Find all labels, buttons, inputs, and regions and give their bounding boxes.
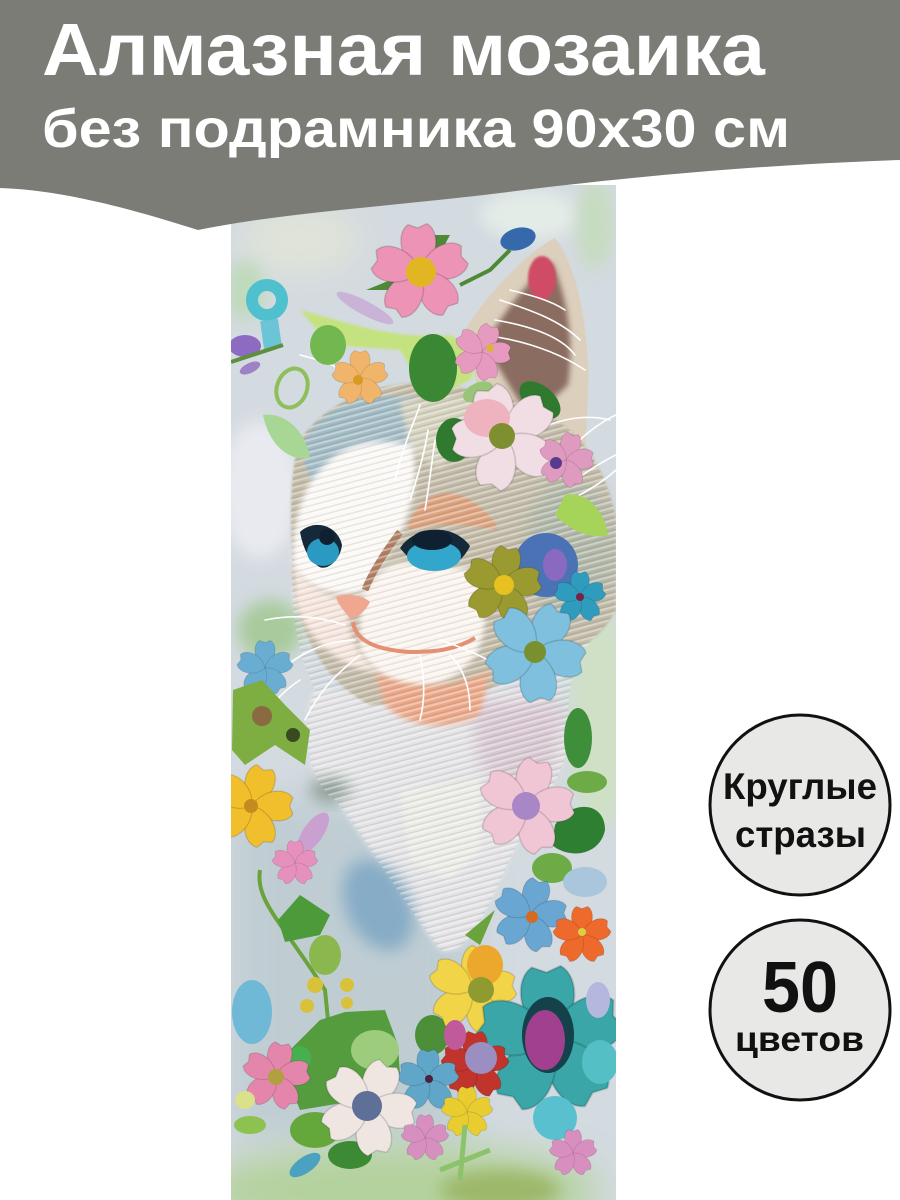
bottom leaves	[234, 1091, 324, 1182]
flower: yellow small bottom	[440, 1086, 494, 1180]
flower: large teal	[474, 964, 616, 1140]
badge: 50 colours	[710, 920, 890, 1100]
flower: orange right	[552, 906, 612, 964]
flower: yellow left	[231, 764, 294, 848]
flower: pink right	[540, 432, 594, 488]
title: Алмазная мозаика	[42, 8, 766, 91]
flower: pink spiky bottom	[400, 1115, 598, 1177]
flower: pink with feather	[272, 812, 329, 884]
leaf: lime	[555, 494, 608, 536]
flower: blue-purple	[514, 533, 578, 597]
flower: teal small	[553, 572, 607, 623]
flower: big pink and white	[451, 382, 554, 492]
badge: round rhinestones	[710, 715, 890, 895]
cat head fur	[291, 383, 616, 705]
flower: yellow large	[429, 944, 517, 1032]
picture background	[231, 185, 616, 1200]
flower: blue small center	[395, 1049, 461, 1111]
green leaves at head	[300, 310, 567, 462]
mauve feather	[336, 292, 394, 324]
flower: pale pink right	[480, 756, 575, 855]
green mass lower	[289, 910, 495, 1169]
cat whiskers	[265, 290, 616, 720]
green and lime leaves left	[232, 680, 310, 765]
flower: small pink	[454, 323, 511, 382]
flower: purple buds	[229, 335, 283, 377]
flower: white large	[301, 1042, 434, 1173]
cat nose and mouth	[336, 595, 475, 652]
ring of green stitches	[274, 366, 310, 410]
badge: 50 colours: цветов	[735, 1020, 864, 1059]
leaf: pale green	[263, 415, 310, 458]
cat eyes	[300, 525, 470, 571]
panel: embroidered cat picture	[231, 185, 616, 1200]
badge: 50 colours: 50	[762, 948, 838, 1028]
flower: blue left	[236, 640, 294, 696]
flower: pale blue left edge	[232, 980, 272, 1044]
subtitle: без подрамника 90х30 см	[42, 99, 790, 159]
cat ear	[465, 238, 588, 450]
flower: light blue	[484, 603, 587, 704]
flower: orange	[331, 350, 389, 406]
flower: blue lower right	[494, 867, 607, 952]
flower: teal top left	[252, 285, 282, 349]
flower: pink lower left	[235, 1037, 317, 1116]
green leaves right	[532, 708, 607, 883]
badge: round rhinestones: Круглые	[723, 766, 877, 807]
badge: round rhinestones: стразы	[735, 814, 866, 855]
flower: pink top	[366, 223, 469, 318]
green sprig and leaves lower left	[257, 870, 354, 1018]
flower: blue bud	[460, 224, 538, 285]
header banner	[0, 0, 900, 230]
flower: olive	[464, 545, 542, 618]
flower: red and pink	[439, 1020, 511, 1099]
cat body	[307, 690, 570, 962]
cat stitch texture	[291, 383, 616, 951]
cat face	[293, 442, 498, 725]
